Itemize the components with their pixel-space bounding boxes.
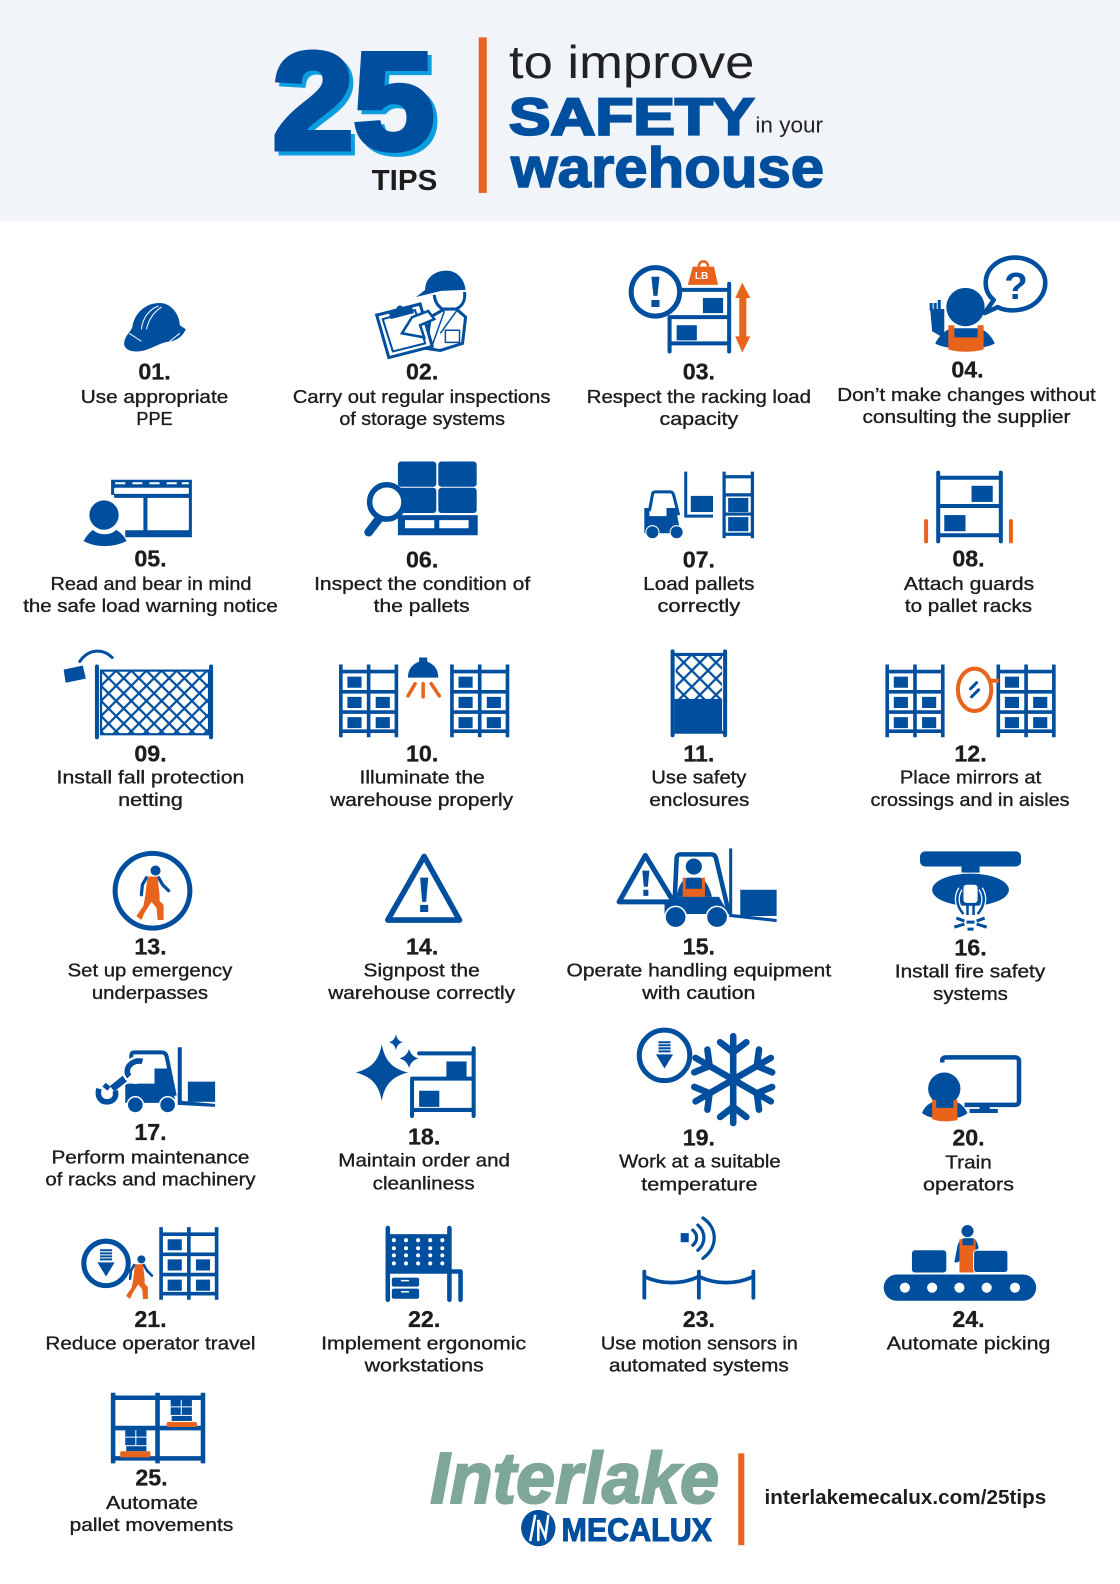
text: Implement ergonomic: [321, 1332, 526, 1353]
text: Train: [945, 1151, 992, 1172]
title: to improve: to improve: [509, 36, 754, 88]
text: Maintain order and: [338, 1149, 510, 1170]
number: 18.: [408, 1123, 440, 1149]
icon: load warning notice: [83, 480, 192, 547]
text: Reduce operator travel: [45, 1332, 256, 1353]
tip 22: [321, 1228, 526, 1375]
text: [567, 960, 832, 1003]
text: with caution: [641, 982, 755, 1003]
text: [587, 386, 811, 429]
tip 13: [68, 853, 233, 1003]
icon: operator asking the supplier: [930, 258, 1045, 352]
number: 09.: [134, 741, 167, 767]
number: 07.: [683, 547, 715, 573]
text: capacity: [659, 408, 739, 429]
tip 03: [587, 261, 811, 429]
title: warehouse: warehouse: [510, 136, 824, 199]
number: 06.: [406, 547, 438, 573]
big number 25 with blue shadow: 25: [277, 30, 438, 183]
text: [68, 960, 233, 1003]
number: 22.: [408, 1306, 440, 1332]
number: 16.: [954, 934, 987, 960]
icon: fall protection netting: [64, 651, 211, 737]
number: 01.: [138, 359, 171, 385]
text: warehouse correctly: [327, 982, 516, 1003]
text: the safe load warning notice: [23, 595, 278, 616]
text: operators: [923, 1174, 1014, 1195]
tip 21: [45, 1227, 256, 1353]
text: [327, 960, 516, 1003]
number: 20.: [952, 1124, 985, 1150]
tip 25: [70, 1393, 233, 1535]
text: warehouse properly: [329, 789, 514, 810]
title: SAFETY: SAFETY: [509, 87, 754, 145]
text: [293, 386, 550, 429]
text: [619, 1150, 781, 1195]
icon: rack with guards: [926, 473, 1011, 541]
icon: forklift with operator and warning: [619, 848, 777, 928]
icon: inspector with clipboard: [377, 271, 466, 358]
title: in your: in your: [755, 112, 824, 137]
text: automated systems: [609, 1354, 789, 1375]
logo: MECALUX: MECALUX: [562, 1512, 712, 1548]
tip 19: [619, 1030, 781, 1195]
number: 19.: [683, 1124, 715, 1150]
tip 16: [895, 851, 1046, 1004]
text: Read and bear in mind: [50, 573, 251, 594]
footer logo and link: [430, 1438, 1046, 1548]
tip 14: [327, 856, 516, 1003]
number: 05.: [134, 546, 167, 572]
text: [601, 1332, 798, 1375]
icon: warning sign: [388, 856, 460, 920]
tip 20: [922, 1057, 1019, 1195]
text: Inspect the condition of: [314, 573, 531, 594]
number: 02.: [406, 359, 438, 385]
header band: [0, 0, 1120, 221]
tip 24: [884, 1225, 1050, 1353]
text: [643, 573, 754, 616]
tip 08: [904, 473, 1034, 616]
icon: fire sprinkler: [920, 851, 1021, 929]
text: Set up emergency: [68, 960, 233, 981]
number: 24.: [952, 1306, 985, 1332]
text: Use appropriate: [81, 386, 228, 407]
icon: operator asking the supplier: ?: [1004, 265, 1028, 308]
orange divider: [738, 1453, 744, 1545]
number: 17.: [134, 1119, 167, 1145]
tip 02: [293, 271, 550, 429]
text: [329, 767, 514, 810]
text: systems: [933, 983, 1008, 1004]
icon: emergency underpass: [115, 853, 190, 928]
icon: operator and training screen: [922, 1057, 1019, 1121]
tip 06: [314, 462, 531, 616]
tip 09: [57, 651, 244, 810]
text: underpasses: [92, 982, 208, 1003]
icon: pallet and magnifier: [369, 462, 478, 535]
text: Carry out regular inspections: [293, 386, 550, 407]
tip 07: [643, 472, 754, 616]
text: temperature: [641, 1174, 757, 1195]
text: Use motion sensors in: [601, 1332, 798, 1353]
icon: forklift loading pallet: [644, 472, 752, 539]
text: [57, 767, 244, 810]
icon: snowflake and low temperature: [639, 1030, 777, 1123]
text: Perform maintenance: [52, 1146, 249, 1167]
text: Operate handling equipment: [567, 960, 832, 981]
logo: Interlake: Interlake: [430, 1438, 719, 1519]
icon: helmet: [124, 303, 186, 351]
tip 23: [601, 1218, 798, 1375]
text: cleanliness: [373, 1173, 475, 1194]
text: [81, 386, 228, 429]
tip 18: [338, 1034, 510, 1194]
text: Respect the racking load: [587, 386, 811, 407]
text: Attach guards: [904, 573, 1034, 594]
text: [837, 384, 1097, 427]
tip 10: [329, 657, 514, 810]
text: netting: [118, 789, 183, 810]
text: enclosures: [649, 789, 749, 810]
text: [338, 1149, 510, 1194]
number: 13.: [134, 933, 167, 959]
text: Use safety: [651, 767, 747, 788]
icon: racks and lamp: [339, 657, 509, 737]
tip 17: [45, 1047, 256, 1190]
text: Work at a suitable: [619, 1150, 781, 1171]
text: consulting the supplier: [862, 406, 1071, 427]
orange divider: [479, 37, 487, 193]
text: pallet movements: [70, 1514, 233, 1535]
icon: motion sensor and barrier: [644, 1218, 753, 1298]
icon: automated picking conveyor: [884, 1225, 1036, 1301]
tip 11: [649, 651, 749, 810]
text: the pallets: [374, 595, 470, 616]
text: [70, 1492, 233, 1535]
icon: sparkling rack: [355, 1034, 474, 1116]
text: Automate: [106, 1492, 198, 1513]
text: workstations: [363, 1354, 484, 1375]
number: 10.: [406, 741, 438, 767]
text: [45, 1146, 256, 1190]
tip 04: [837, 258, 1097, 427]
text: [871, 767, 1070, 810]
text: [904, 573, 1034, 616]
number: 21.: [134, 1306, 167, 1332]
tip 15: [567, 848, 832, 1003]
number: 25.: [135, 1465, 168, 1491]
icon: ergonomic workstation: [388, 1228, 461, 1300]
url: interlakemecalux.com/25tips: [765, 1487, 1046, 1509]
text: [895, 961, 1046, 1004]
text: Install fall protection: [57, 767, 244, 788]
text: of racks and machinery: [45, 1169, 256, 1190]
logo: Mecalux globe: [521, 1510, 555, 1546]
text: Load pallets: [643, 573, 754, 594]
text: [649, 767, 749, 810]
icon: reduce operator travel: [84, 1227, 218, 1300]
icon: racks and mirror: [886, 665, 1055, 737]
icon: automated pallet shuttle rack: [111, 1393, 205, 1463]
text: Place mirrors at: [900, 767, 1042, 788]
number: 03.: [683, 359, 715, 385]
text: of storage systems: [339, 408, 505, 429]
text: Illuminate the: [360, 767, 485, 788]
big number 25 with blue shadow: 25: [273, 25, 434, 178]
text: PPE: [136, 408, 173, 429]
text: Automate picking: [887, 1332, 1050, 1353]
icon: safety enclosure: [673, 651, 725, 735]
number: 11.: [683, 741, 714, 767]
text: [23, 573, 278, 616]
number: 12.: [954, 741, 987, 767]
number: 23.: [683, 1306, 715, 1332]
text: crossings and in aisles: [871, 789, 1070, 810]
text: [923, 1151, 1014, 1195]
tip 12: [871, 665, 1070, 810]
text: Don’t make changes without: [837, 384, 1097, 405]
text: [321, 1332, 526, 1375]
number: 04.: [951, 357, 984, 383]
number: 15.: [683, 933, 715, 959]
text: correctly: [657, 595, 741, 616]
tip 05: [23, 480, 278, 616]
tip 01: [81, 303, 228, 429]
number: 08.: [952, 546, 985, 572]
icon: load capacity rack: [631, 261, 750, 352]
icon: load capacity rack: LB: [695, 271, 708, 282]
text: [314, 573, 531, 616]
text: Install fire safety: [895, 961, 1046, 982]
text: Signpost the: [364, 960, 480, 981]
text: to pallet racks: [905, 595, 1032, 616]
label: TIPS: TIPS: [372, 164, 437, 196]
icon: forklift with wrench: [98, 1047, 215, 1113]
number: 14.: [406, 933, 438, 959]
